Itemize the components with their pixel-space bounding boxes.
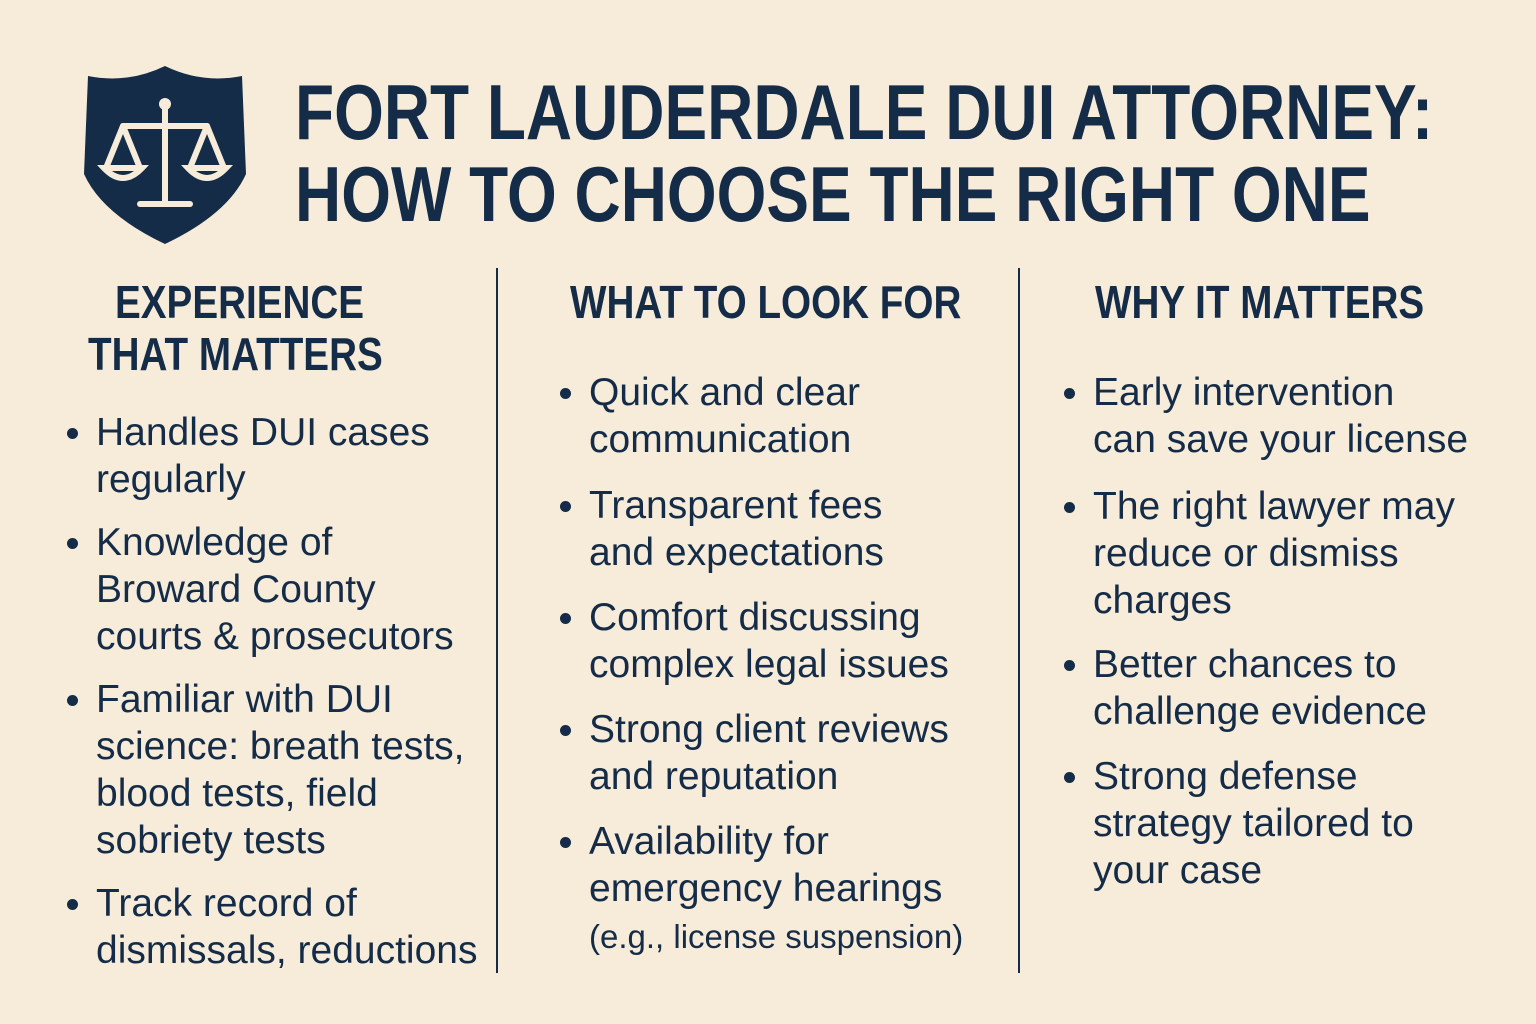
bullet list: regularly (96, 458, 246, 501)
bullet list: blood tests, field (96, 772, 378, 815)
title (295, 68, 1433, 238)
bullet list: Handles DUI cases (96, 411, 430, 454)
heading: why it matters: WHY IT MATTERS (1095, 276, 1424, 328)
bullet list: Availability for (589, 820, 829, 863)
bullet list: science: breath tests, (96, 725, 465, 768)
panel: why it matters (1064, 276, 1468, 892)
bullet list: and expectations (589, 531, 884, 574)
bullet list: Comfort discussing (589, 596, 921, 639)
bullet list (1064, 371, 1468, 892)
bullet list: can save your license (1093, 418, 1468, 461)
heading: experience (88, 276, 383, 380)
bullet list: Strong client reviews (589, 708, 949, 751)
bullet list: reduce or dismiss (1093, 532, 1399, 575)
bullet list: Early intervention (1093, 371, 1394, 414)
bullet list: strategy tailored to (1093, 802, 1414, 845)
bullet list: dismissals, reductions (96, 929, 477, 972)
heading: what to look for: WHAT TO LOOK FOR (570, 276, 961, 328)
bullet list: communication (589, 418, 851, 461)
heading: experience: THAT MATTERS (88, 328, 383, 380)
bullet list: challenge evidence (1093, 690, 1427, 733)
bullet list: charges (1093, 579, 1232, 622)
bullet list: sobriety tests (96, 819, 326, 862)
bullet list: your case (1093, 849, 1262, 892)
bullet list: emergency hearings (589, 867, 942, 910)
icon: shield with scales (84, 66, 246, 244)
bullet list: (e.g., license suspension) (589, 918, 963, 955)
bullet list: courts & prosecutors (96, 615, 454, 658)
panel: experience that matters (67, 276, 477, 972)
bullet list: Familiar with DUI (96, 678, 393, 721)
bullet list: and reputation (589, 755, 838, 798)
bullet list: Broward County (96, 568, 376, 611)
bullet list: Better chances to (1093, 643, 1397, 686)
bullet list: complex legal issues (589, 643, 949, 686)
bullet list: Strong defense (1093, 755, 1358, 798)
bullet list: The right lawyer may (1093, 485, 1455, 528)
heading: experience: EXPERIENCE (115, 276, 364, 328)
title: FORT LAUDERDALE DUI ATTORNEY: (295, 68, 1433, 156)
bullet list (67, 411, 477, 972)
bullet list: Track record of (96, 882, 357, 925)
panel: what to look for (560, 276, 963, 955)
bullet list: Transparent fees (589, 484, 882, 527)
bullet list: Quick and clear (589, 371, 860, 414)
title: HOW TO CHOOSE THE RIGHT ONE (295, 150, 1371, 238)
bullet list: Knowledge of (96, 521, 332, 564)
bullet list (560, 371, 963, 955)
